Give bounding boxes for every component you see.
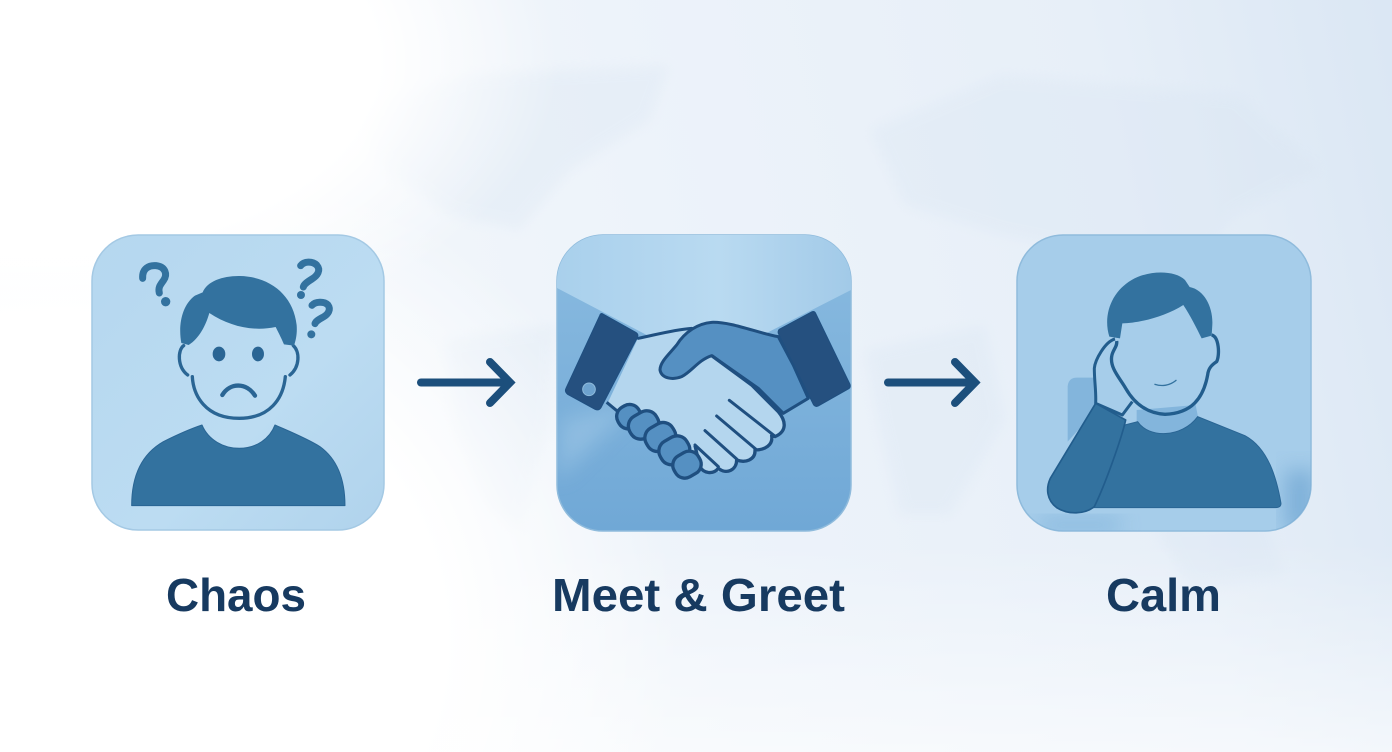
panel: calm [1017,235,1315,532]
cuff button [583,383,595,396]
label: calm: Calm [1106,569,1221,621]
hair [1107,272,1212,338]
question mark dots [161,291,315,338]
smile [1155,380,1176,386]
background with faint world map [375,0,1392,752]
face outline [1111,335,1218,414]
hand [1094,339,1132,415]
hair [180,276,297,346]
icon: question marks [143,262,329,324]
left hand [608,327,785,472]
icon: handshake [565,312,850,482]
body [1093,417,1281,508]
phone [1068,378,1095,442]
right hand [660,322,808,413]
arrow: chaos to meet and greet [421,362,510,403]
grip fingers [613,401,705,482]
icon: calm person on phone [1048,272,1281,513]
icon: confused person [132,262,345,506]
panel: meet and greet [557,230,851,531]
right cuff [778,312,850,406]
label: chaos: Chaos [166,569,306,621]
panel: chaos [92,235,384,530]
label: meet and greet: Meet & Greet [552,569,845,621]
face outline [179,346,298,418]
left cuff [565,314,638,410]
body [132,425,345,506]
outline upper left arm [638,328,692,338]
arrow: meet and greet to calm [888,362,975,403]
arm [1048,403,1126,513]
eyes [213,347,225,361]
fingers of left hand [695,356,784,473]
neck [1137,405,1198,434]
mouth [222,386,255,396]
